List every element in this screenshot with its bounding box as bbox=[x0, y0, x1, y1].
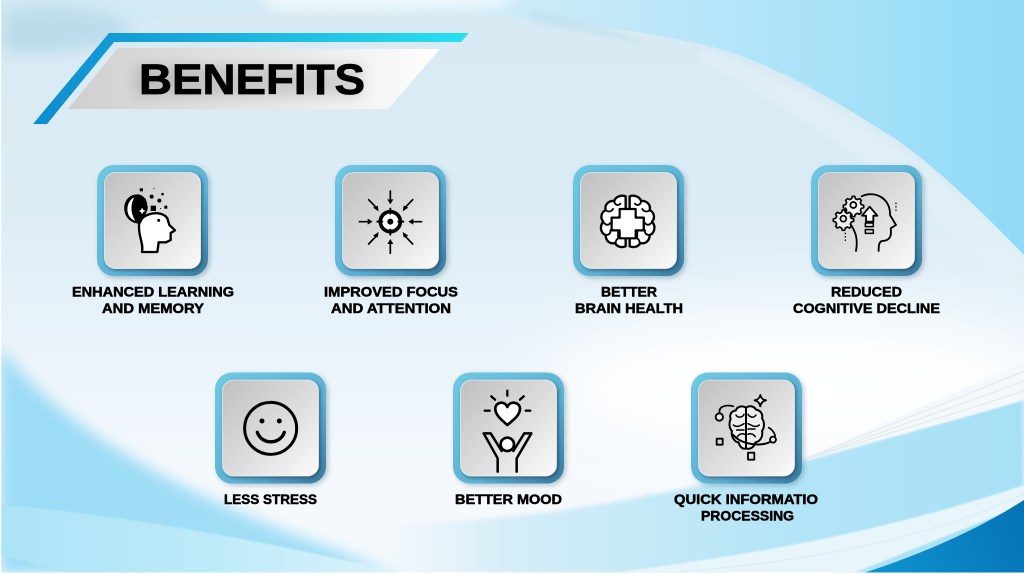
icon: focus target bbox=[359, 191, 422, 253]
title shadow bbox=[135, 66, 363, 96]
icon: head with gears bbox=[833, 194, 896, 251]
card: better brain health bbox=[573, 165, 684, 316]
card: quick information processing bbox=[674, 372, 818, 524]
icon: person with heart bbox=[484, 391, 531, 472]
label: BETTER MOOD bbox=[455, 491, 562, 507]
title: BENEFITS bbox=[139, 56, 365, 104]
card: enhanced learning and memory bbox=[72, 165, 234, 316]
icon: brain with orbit bbox=[716, 395, 776, 460]
card: enhanced learning and memory: AND MEMORY bbox=[102, 300, 205, 316]
label: IMPROVED FOCUS bbox=[324, 284, 458, 300]
banner plate bbox=[68, 48, 440, 109]
label: QUICK INFORMATIO bbox=[674, 491, 818, 507]
card: quick information processing: PROCESSING bbox=[701, 508, 794, 524]
label: BETTER bbox=[601, 284, 657, 300]
icon: head with stars bbox=[124, 188, 175, 252]
icon: smiley bbox=[245, 402, 297, 454]
icon: brain with cross bbox=[601, 196, 654, 247]
banner accent bar bbox=[33, 33, 469, 124]
card: improved focus and attention bbox=[324, 165, 458, 316]
title banner bbox=[33, 33, 469, 124]
label: ENHANCED LEARNING bbox=[72, 284, 234, 300]
card: improved focus and attention: AND ATTENTION bbox=[331, 300, 451, 316]
label: LESS STRESS bbox=[224, 491, 317, 507]
card: reduced cognitive decline: COGNITIVE DECLINE bbox=[793, 300, 940, 316]
card: less stress bbox=[215, 372, 326, 507]
card: better brain health: BRAIN HEALTH bbox=[575, 300, 683, 316]
card: better mood bbox=[453, 372, 564, 507]
label: REDUCED bbox=[831, 284, 902, 300]
card: reduced cognitive decline bbox=[793, 165, 940, 316]
